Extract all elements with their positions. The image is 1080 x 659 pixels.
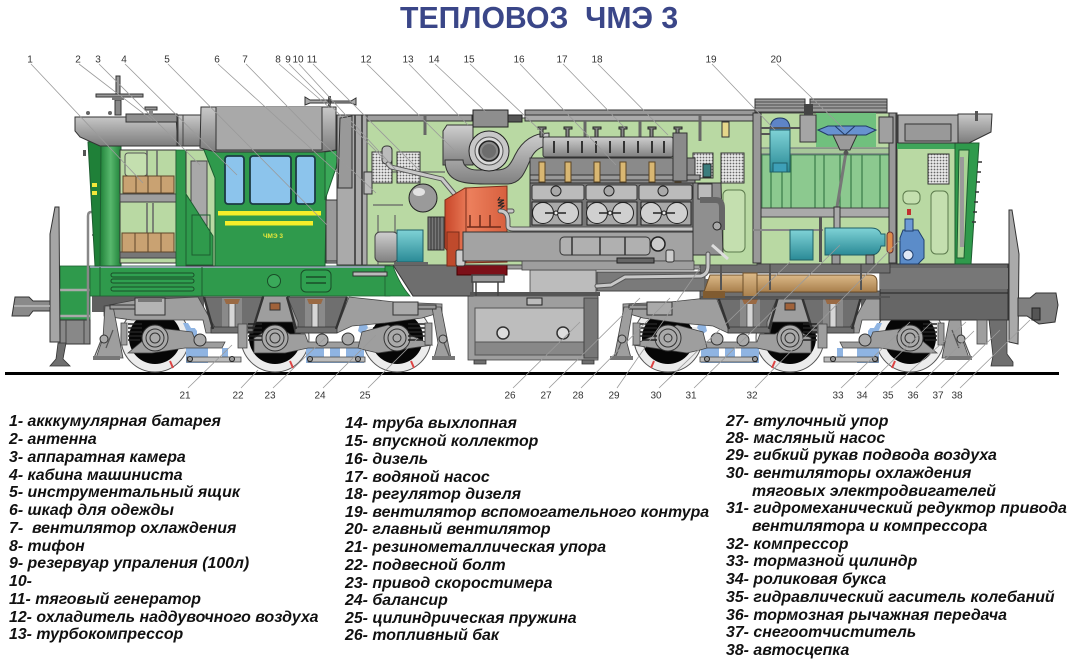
legend column 3: 38- автосцепка [726, 642, 850, 659]
left end: platform, pilot, coupler [12, 207, 117, 366]
legend column 1: 9- резервуар упраления (100л) [9, 555, 249, 572]
icon: horn [305, 96, 356, 107]
callout numbers, top: 8 [275, 54, 281, 66]
callout numbers, top: 11 [307, 54, 318, 66]
legend column 3: 31- гидромеханический редуктор привода [726, 500, 1067, 517]
callout numbers, bottom: 35 [882, 390, 894, 402]
callout numbers, top: 4 [121, 54, 127, 66]
callout numbers, bottom: 26 [504, 390, 516, 402]
callout numbers, top: 1 [27, 54, 33, 66]
legend column 1: 11- тяговый генератор [9, 591, 201, 608]
callout numbers, top: 17 [556, 54, 568, 66]
icon: battery boxes [122, 176, 174, 252]
right bogie [610, 295, 973, 372]
legend column 3: 33- тормазной цилиндр [726, 553, 918, 570]
traction generator [375, 230, 428, 265]
callout numbers, top: 7 [242, 54, 248, 66]
callout numbers, bottom: 30 [650, 390, 662, 402]
legend column 2: 18- регулятор дизеля [345, 486, 522, 503]
callout numbers, bottom [179, 390, 963, 402]
legend column 3: 32- компрессор [726, 536, 849, 553]
cab windows [225, 156, 315, 204]
callout numbers, top: 12 [360, 54, 372, 66]
legend column 1: 6- шкаф для одежды [9, 502, 174, 519]
legend column 1: 5- инструментальный ящик [9, 484, 241, 501]
legend column 3: 28- масляный насос [725, 430, 885, 447]
callout numbers, bottom: 32 [746, 390, 758, 402]
legend column 1: 13- турбокомпрессор [9, 626, 184, 643]
locomotive illustration [12, 76, 1058, 372]
right end: frame, pilot, coupler [880, 210, 1058, 366]
legend column 3: 36- тормозная рычажная передача [726, 607, 1007, 624]
legend column 1: 1- акккумулярная батарея [9, 413, 222, 430]
legend column 2: 15- впускной коллектор [345, 433, 539, 450]
callout numbers, bottom: 28 [572, 390, 584, 402]
injectors [539, 162, 681, 182]
inspection panels behind cab [326, 115, 367, 265]
legend column 2: 16- дизель [345, 451, 428, 468]
radiator compartment [753, 99, 897, 264]
callout numbers, top: 6 [214, 54, 220, 66]
legend column 1: 12- охладитель наддувочного воздуха [9, 609, 319, 626]
legend column 3: 37- снегоотчиститель [726, 624, 916, 641]
intake duct [443, 125, 549, 184]
legend column 2: 25- цилиндрическая пружина [344, 610, 577, 627]
legend column 3: 29- гибкий рукав подвода воздуха [725, 447, 997, 464]
callout numbers, bottom: 33 [832, 390, 844, 402]
mesh vents [372, 152, 392, 183]
callout numbers, bottom: 36 [907, 390, 919, 402]
cab: ЧМЭ 3 [263, 233, 283, 240]
legend column 1: 2- антенна [8, 431, 97, 448]
legend column 1 [8, 413, 319, 643]
legend column 1: 8- тифон [9, 538, 85, 555]
red auxiliary housing [445, 186, 507, 266]
icon: antenna [86, 76, 157, 116]
main fan [800, 104, 893, 207]
legend column 3 [725, 413, 1067, 659]
compressor [790, 207, 893, 264]
diesel engine [463, 127, 728, 286]
callout numbers, top: 20 [770, 54, 782, 66]
front nose [83, 141, 121, 266]
left bogie [92, 295, 455, 372]
rail [5, 372, 1059, 375]
callout numbers, top: 19 [705, 54, 717, 66]
legend column 2: 22- подвесной болт [344, 557, 506, 574]
cab roof [200, 107, 336, 152]
callout numbers, top: 14 [428, 54, 440, 66]
legend column 3: 30- вентиляторы охлаждения [726, 465, 972, 482]
callout numbers, top: 10 [292, 54, 304, 66]
fuel tank [468, 296, 598, 364]
legend column 3: тяговых электродвигателей [752, 483, 996, 500]
auxiliary circuit fan [761, 118, 800, 172]
legend column 1: 7- вентилятор охлаждения [9, 520, 237, 537]
title: ТЕПЛОВОЗ ЧМЭ 3 [400, 2, 678, 35]
front compartment with batteries [120, 150, 176, 263]
callout numbers, bottom: 29 [608, 390, 620, 402]
cab side door section [176, 150, 216, 266]
callout numbers, bottom: 21 [179, 390, 191, 402]
central under-frame [393, 262, 890, 299]
callout numbers, bottom: 31 [685, 390, 697, 402]
cab [202, 145, 339, 266]
callout leader lines [31, 64, 1030, 388]
brown air duct [700, 264, 890, 298]
rear hood section [897, 111, 992, 264]
callout numbers, top: 9 [285, 54, 291, 66]
legend column 2: 23- привод скоростимера [344, 575, 553, 592]
callout numbers, top: 16 [513, 54, 525, 66]
valve caps [538, 127, 682, 137]
callout numbers, top: 18 [591, 54, 603, 66]
callout numbers, top: 5 [164, 54, 170, 66]
callout numbers, top: 13 [402, 54, 414, 66]
callout numbers, bottom: 23 [264, 390, 276, 402]
legend column 2: 26- топливный бак [344, 627, 500, 644]
legend column 1: 3- аппаратная камера [9, 449, 186, 466]
legend column 1: 4- кабина машиниста [8, 467, 183, 484]
legend column 2: 17- водяной насос [345, 469, 490, 486]
legend column 3: 27- втулочный упор [725, 413, 889, 430]
callout numbers, bottom: 25 [359, 390, 371, 402]
rear hydro-mechanical gearbox [900, 209, 924, 264]
callout numbers, bottom: 38 [951, 390, 963, 402]
callout numbers, top [27, 54, 782, 66]
legend column 2 [344, 415, 709, 644]
callout numbers, top: 2 [75, 54, 81, 66]
legend column 3: вентилятора и компрессора [752, 518, 987, 535]
engine room background [367, 110, 757, 265]
callout numbers, bottom: 22 [232, 390, 244, 402]
callout numbers, top: 15 [463, 54, 475, 66]
turbocharger [469, 110, 522, 171]
grille [755, 99, 887, 112]
green frame band [90, 266, 410, 296]
callout numbers, bottom: 37 [932, 390, 944, 402]
callout numbers, bottom: 27 [540, 390, 552, 402]
reservoir sphere [364, 146, 512, 212]
legend column 2: 19- вентилятор вспомогательного контура [345, 504, 709, 521]
legend column 2: 20- главный вентилятор [344, 521, 551, 538]
callout numbers, top: 3 [95, 54, 101, 66]
legend column 1: 10- [9, 573, 32, 590]
front hood roof [75, 114, 202, 146]
callout numbers, bottom: 24 [314, 390, 326, 402]
legend column 2: 14- труба выхлопная [345, 415, 517, 432]
legend column 2: 21- резинометаллическая упора [344, 539, 606, 556]
legend column 2: 24- балансир [344, 592, 448, 609]
legend column 3: 35- гидравлический гаситель колебаний [726, 589, 1055, 606]
legend column 3: 34- роликовая букса [726, 571, 886, 588]
callout numbers, bottom: 34 [856, 390, 868, 402]
